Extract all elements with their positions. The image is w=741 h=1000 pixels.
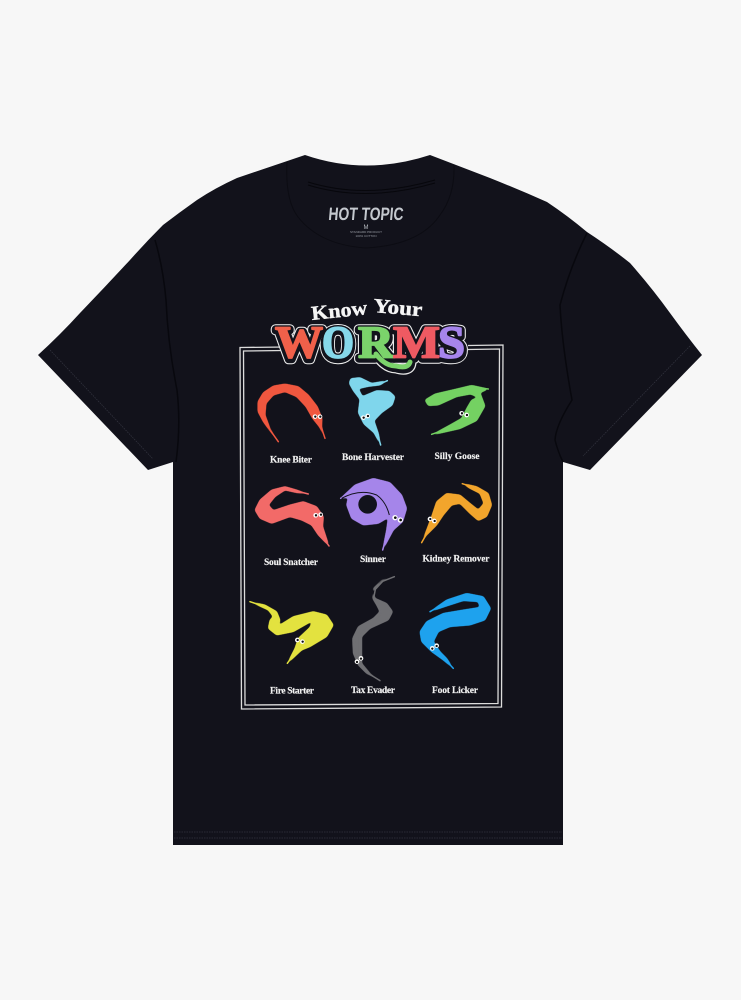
white outer outline: R bbox=[358, 318, 395, 369]
worm: Knee Biter bbox=[258, 384, 325, 466]
label: Bone Harvester bbox=[342, 453, 405, 463]
black inner outline: O bbox=[322, 318, 354, 369]
neck label: Hot Topic bbox=[328, 204, 404, 238]
white outer outline: O bbox=[322, 318, 354, 369]
label: Silly Goose bbox=[434, 452, 480, 462]
neck label: Hot Topic: HOT TOPIC bbox=[328, 204, 404, 224]
worm: Foot Licker bbox=[420, 593, 491, 696]
t-shirt body bbox=[38, 155, 702, 845]
label: Soul Snatcher bbox=[264, 558, 319, 568]
worm: Tax Evader bbox=[351, 577, 396, 696]
black inner outline: M bbox=[393, 318, 440, 369]
R swirl outline bbox=[376, 354, 411, 369]
label: Tax Evader bbox=[351, 686, 396, 696]
R swirl bbox=[376, 354, 411, 369]
white outer outline: S bbox=[438, 318, 465, 369]
neck label: Hot Topic: M bbox=[364, 225, 368, 231]
colored letters: S bbox=[438, 316, 465, 368]
worm: Kidney Remover bbox=[422, 483, 492, 564]
neck label: Hot Topic: 100% COTTON bbox=[355, 234, 377, 238]
white outer outline: M bbox=[393, 318, 440, 369]
sleeve and hem stitching bbox=[50, 346, 690, 838]
colored letters: W bbox=[275, 316, 323, 368]
worm body bbox=[353, 577, 394, 681]
label: Sinner bbox=[360, 555, 387, 565]
title: Know Your: Know bbox=[310, 297, 369, 325]
black inner outline: S bbox=[438, 318, 465, 369]
worm body bbox=[250, 602, 333, 663]
white outer outline bbox=[275, 318, 465, 369]
colored letters: R bbox=[358, 316, 395, 368]
black inner outline: R bbox=[358, 318, 395, 369]
worm body bbox=[255, 487, 329, 546]
worm: Fire Starter bbox=[250, 602, 333, 696]
worm body bbox=[258, 384, 325, 442]
title: WORMS bbox=[275, 316, 465, 369]
worm: Silly Goose bbox=[425, 385, 488, 462]
t-shirt seams and collar bbox=[155, 162, 587, 462]
title: Know Your bbox=[310, 295, 423, 325]
worm: Bone Harvester bbox=[342, 378, 405, 463]
double line frame bbox=[240, 345, 503, 709]
worm body bbox=[422, 483, 492, 543]
worm body bbox=[420, 593, 491, 668]
worm body bbox=[425, 385, 488, 435]
worm body bbox=[349, 378, 395, 445]
black inner outline: W bbox=[275, 318, 323, 369]
label: Foot Licker bbox=[432, 686, 479, 696]
worm body bbox=[341, 478, 407, 550]
white outer outline: W bbox=[275, 318, 323, 369]
worm: Soul Snatcher bbox=[255, 487, 329, 568]
black inner outline bbox=[275, 318, 465, 369]
title: Know Your: Your bbox=[373, 295, 423, 321]
label: Knee Biter bbox=[270, 456, 313, 466]
label: Kidney Remover bbox=[422, 554, 490, 564]
label: Fire Starter bbox=[270, 686, 315, 696]
colored letters bbox=[275, 316, 465, 368]
colored letters: O bbox=[322, 316, 354, 368]
colored letters: M bbox=[393, 316, 440, 368]
neck label: Hot Topic: STANDARD PRODUCT bbox=[350, 230, 382, 234]
worm: Sinner bbox=[341, 478, 407, 565]
